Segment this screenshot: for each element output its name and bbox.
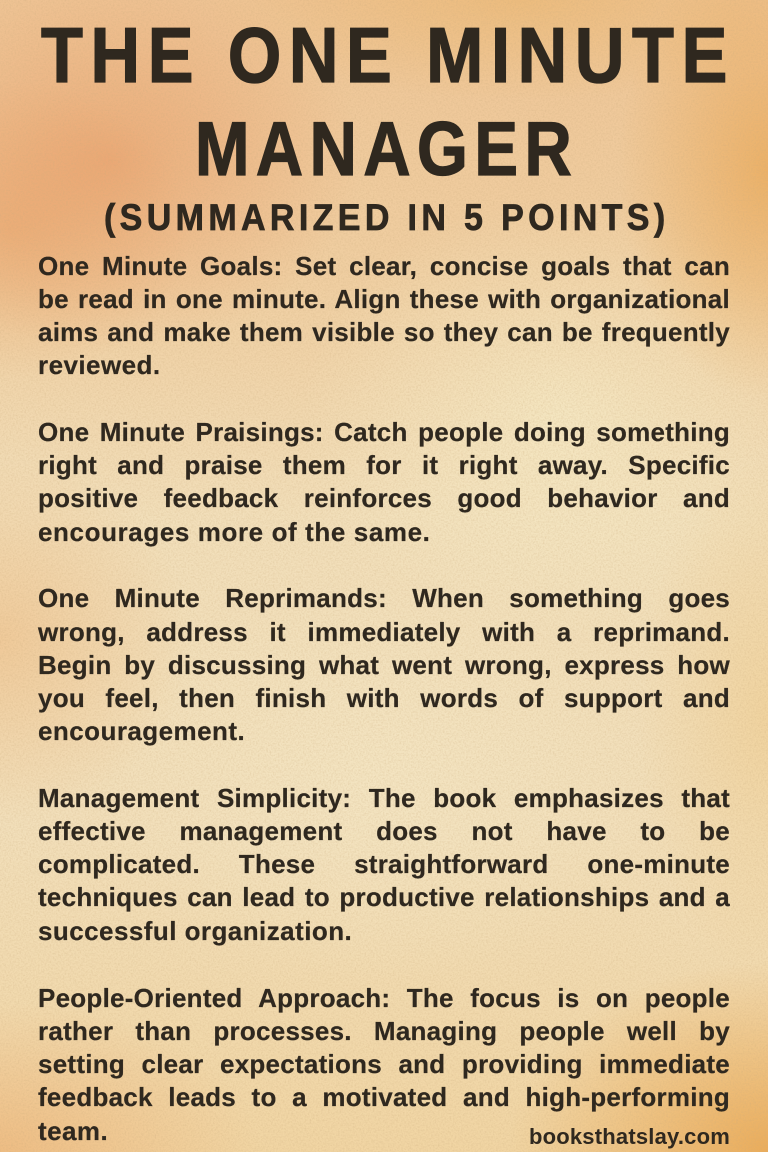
point 1: One Minute Goals: aims and make them visible so they can be frequently (38, 317, 730, 347)
point 2: One Minute Praisings: right and praise them for it right away. Specific (38, 450, 730, 480)
point 3: One Minute Reprimands: encouragement. (38, 716, 245, 746)
website credit: booksthatslay.com (529, 1124, 730, 1149)
point 3: One Minute Reprimands: you feel, then finish with words of support and (38, 683, 730, 713)
point 5: People-Oriented Approach: People-Oriented Approach: The focus is on people (38, 983, 730, 1013)
point 5: People-Oriented Approach (38, 983, 730, 1146)
point 2: One Minute Praisings: One Minute Praisings: Catch people doing something (38, 417, 730, 447)
point 5: People-Oriented Approach: setting clear expectations and providing immediate (38, 1049, 730, 1079)
point 4: Management Simplicity: techniques can lead to productive relationships and a (38, 882, 730, 912)
subtitle: (SUMMARIZED IN 5 POINTS) (104, 197, 665, 238)
title: MANAGER (195, 107, 572, 192)
title: THE ONE MINUTE (41, 11, 727, 99)
title (41, 11, 727, 238)
point 4: Management Simplicity: complicated. These straightforward one-minute (38, 849, 730, 879)
point 3: One Minute Reprimands: Begin by discussing what went wrong, express how (38, 650, 730, 680)
point 4: Management Simplicity: effective management does not have to be (38, 816, 730, 846)
point 3: One Minute Reprimands: wrong, address it immediately with a reprimand. (38, 617, 730, 647)
point 4: Management Simplicity: Management Simplicity: The book emphasizes that (38, 783, 730, 813)
point 2: One Minute Praisings (38, 417, 730, 547)
point 1: One Minute Goals (38, 251, 730, 380)
point 4: Management Simplicity: successful organization. (38, 916, 352, 946)
point 1: One Minute Goals: reviewed. (38, 350, 161, 380)
point 2: One Minute Praisings: encourages more of the same. (38, 517, 430, 547)
point 1: One Minute Goals: be read in one minute. Align these with organizational (38, 284, 730, 314)
point 4: Management Simplicity (38, 783, 730, 946)
point 2: One Minute Praisings: positive feedback reinforces good behavior and (38, 483, 730, 513)
point 5: People-Oriented Approach: rather than processes. Managing people well by (38, 1016, 730, 1046)
point 1: One Minute Goals: One Minute Goals: Set clear, concise goals that can (38, 251, 730, 281)
point 3: One Minute Reprimands (38, 583, 730, 746)
point 5: People-Oriented Approach: feedback leads to a motivated and high-performing (38, 1082, 730, 1112)
point 5: People-Oriented Approach: team. (38, 1116, 108, 1146)
point 3: One Minute Reprimands: One Minute Reprimands: When something goes (38, 583, 730, 613)
